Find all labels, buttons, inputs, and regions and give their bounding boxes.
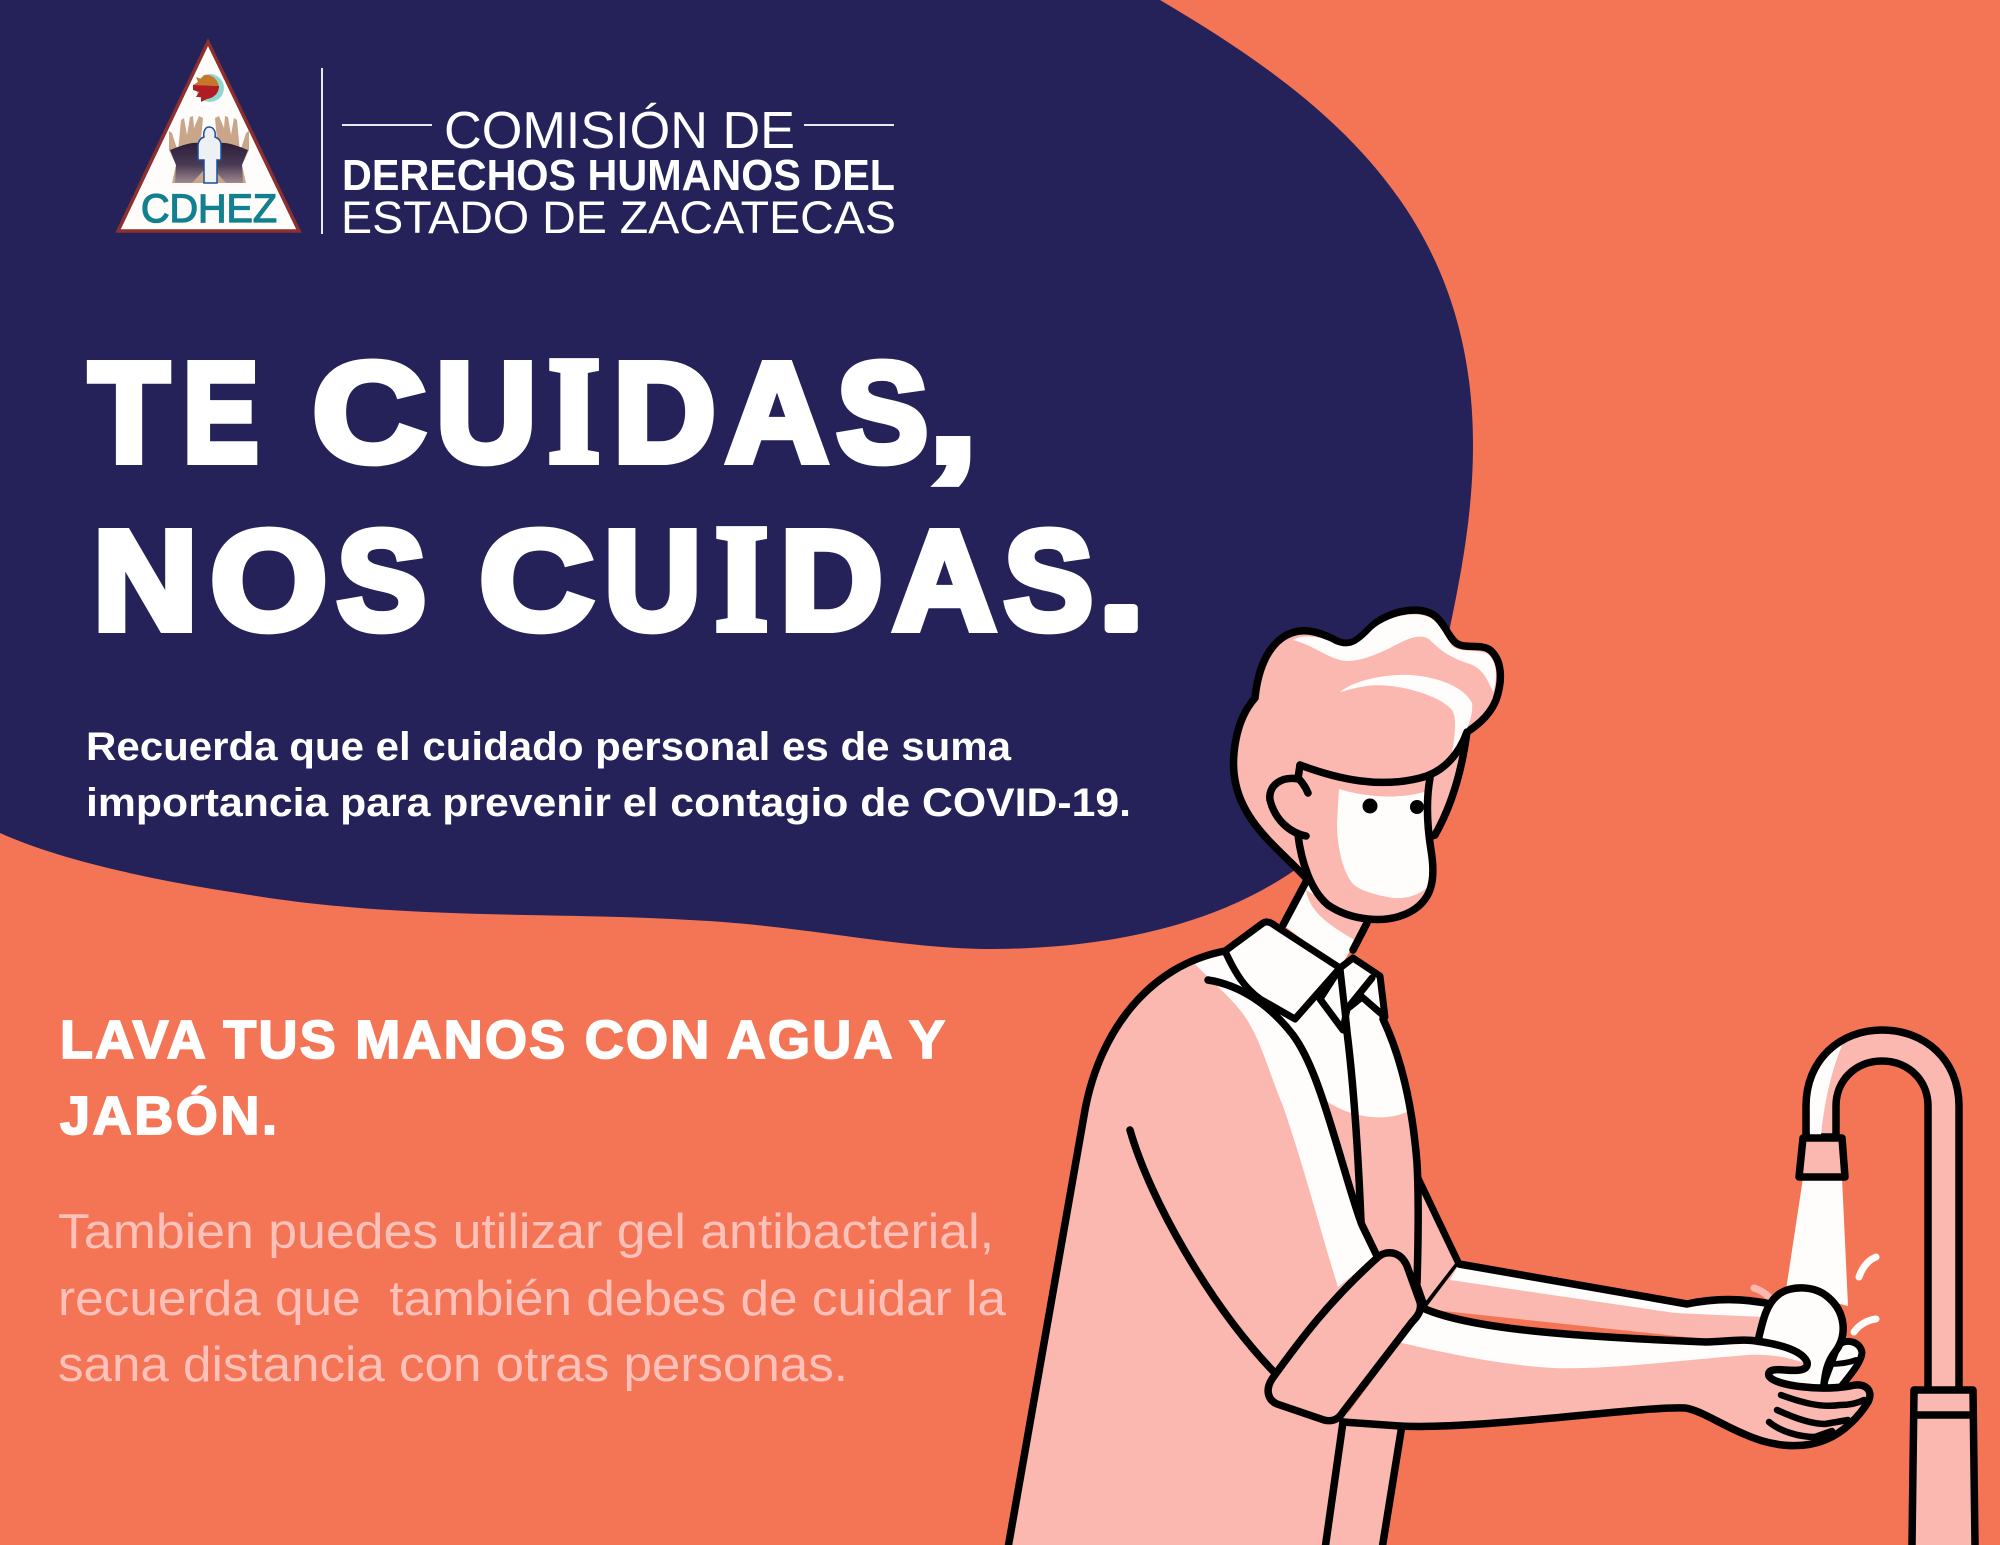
body text <box>58 1205 1007 1392</box>
title line 1: T <box>89 333 169 491</box>
logo acronym: CDHEZ <box>141 187 277 231</box>
neck <box>1283 878 1369 968</box>
heading line 2: JABÓN. <box>60 1086 277 1146</box>
title line 1: U <box>436 333 536 491</box>
faucet base seam <box>1914 1411 1973 1419</box>
thumb <box>1822 1341 1862 1388</box>
title line 1: I <box>548 326 600 494</box>
hair back <box>1234 610 1500 877</box>
intro text <box>86 725 1131 825</box>
mask <box>1337 789 1432 898</box>
splash lower right <box>1854 1319 1876 1332</box>
face <box>1298 766 1433 919</box>
title line 2: U <box>604 501 701 659</box>
ear <box>1270 765 1308 836</box>
name line 3: ESTADO DE ZACATECAS <box>341 192 896 243</box>
splash upper right <box>1859 1257 1876 1277</box>
intro line 2: importancia para prevenir el contagio de COVID-19. <box>86 781 1131 825</box>
logo sun icon <box>193 74 224 102</box>
title line 1: E <box>183 333 258 491</box>
arm highlight <box>1398 1309 1805 1368</box>
logo <box>118 42 299 231</box>
body outer line <box>1008 951 1225 1545</box>
title line 1: S <box>837 333 928 491</box>
splash pink <box>1754 1288 1769 1297</box>
title line 1: , <box>929 333 977 491</box>
sleeve inner line <box>1208 980 1377 1256</box>
body line 2: recuerda que también debes de cuidar la <box>58 1272 1007 1326</box>
intro line 1: Recuerda que el cuidado personal es de suma <box>86 725 1012 769</box>
far arm triangle <box>1417 1178 1459 1308</box>
faucet pipe <box>1806 1030 1959 1392</box>
logo vertical separator <box>321 68 323 234</box>
placket line <box>1340 968 1361 1221</box>
title line 1: C <box>312 333 426 491</box>
shirt white chest <box>1195 951 1407 1287</box>
logo hands shadow <box>170 143 248 183</box>
title line 2: O <box>210 501 327 659</box>
logo right hand <box>213 116 249 183</box>
faucet base <box>1912 1390 1975 1545</box>
head <box>1234 610 1500 919</box>
person <box>1008 610 1870 1545</box>
sleeve crease <box>1130 1130 1273 1371</box>
faucet highlight <box>1810 1045 1842 1135</box>
face outline <box>1298 778 1433 919</box>
name line 1: COMISIÓN DE <box>444 102 795 160</box>
title line 1: D <box>613 333 716 491</box>
hair top highlight <box>1293 614 1496 692</box>
logo left hand <box>169 116 205 183</box>
trousers <box>1325 1422 1402 1545</box>
heading <box>60 1010 945 1146</box>
body line 1: Tambien puedes utilizar gel antibacterial, <box>58 1205 994 1259</box>
main title <box>89 326 1145 662</box>
title line 2: N <box>93 501 198 659</box>
title line 2: S <box>337 501 426 659</box>
faucet nozzle <box>1799 1138 1845 1177</box>
eye right <box>1410 800 1424 814</box>
logo person <box>198 127 221 183</box>
body line 3: sana distancia con otras personas. <box>58 1338 848 1392</box>
title line 2: . <box>1098 501 1145 659</box>
logo triangle <box>118 42 299 231</box>
thumb crease <box>1830 1360 1856 1364</box>
rule left <box>342 124 432 126</box>
title line 2: I <box>715 494 768 662</box>
navy blob panel <box>0 0 1473 949</box>
chest right line <box>1383 1019 1418 1283</box>
fingers <box>1769 1395 1864 1437</box>
far forearm <box>1425 1264 1775 1345</box>
title line 2: C <box>479 501 594 659</box>
torso and sleeve <box>1008 951 1418 1545</box>
collar <box>1225 922 1385 1030</box>
name line 2: DERECHOS HUMANOS DEL <box>342 151 895 200</box>
title line 2: A <box>893 501 996 659</box>
chest pink panel <box>1325 1100 1417 1283</box>
splash inner <box>1728 1323 1750 1328</box>
soap in hands <box>1757 1288 1843 1392</box>
near forearm and hand <box>1343 1309 1870 1446</box>
title line 2: S <box>1004 501 1093 659</box>
faucet <box>1786 1030 1975 1545</box>
water splashes <box>1728 1257 1876 1332</box>
hair fringe line <box>1300 732 1467 782</box>
organisation name <box>341 102 896 243</box>
water stream <box>1786 1178 1848 1306</box>
hair swoosh highlight <box>1340 675 1472 753</box>
eye left <box>1362 798 1378 814</box>
title line 1 <box>89 326 977 494</box>
heading line 1: LAVA TUS MANOS CON AGUA Y <box>60 1010 945 1070</box>
title line 2: D <box>780 501 883 659</box>
title line 2 <box>93 494 1145 662</box>
rule right <box>804 124 894 126</box>
title line 1: A <box>726 333 828 491</box>
cuff <box>1268 1253 1421 1421</box>
